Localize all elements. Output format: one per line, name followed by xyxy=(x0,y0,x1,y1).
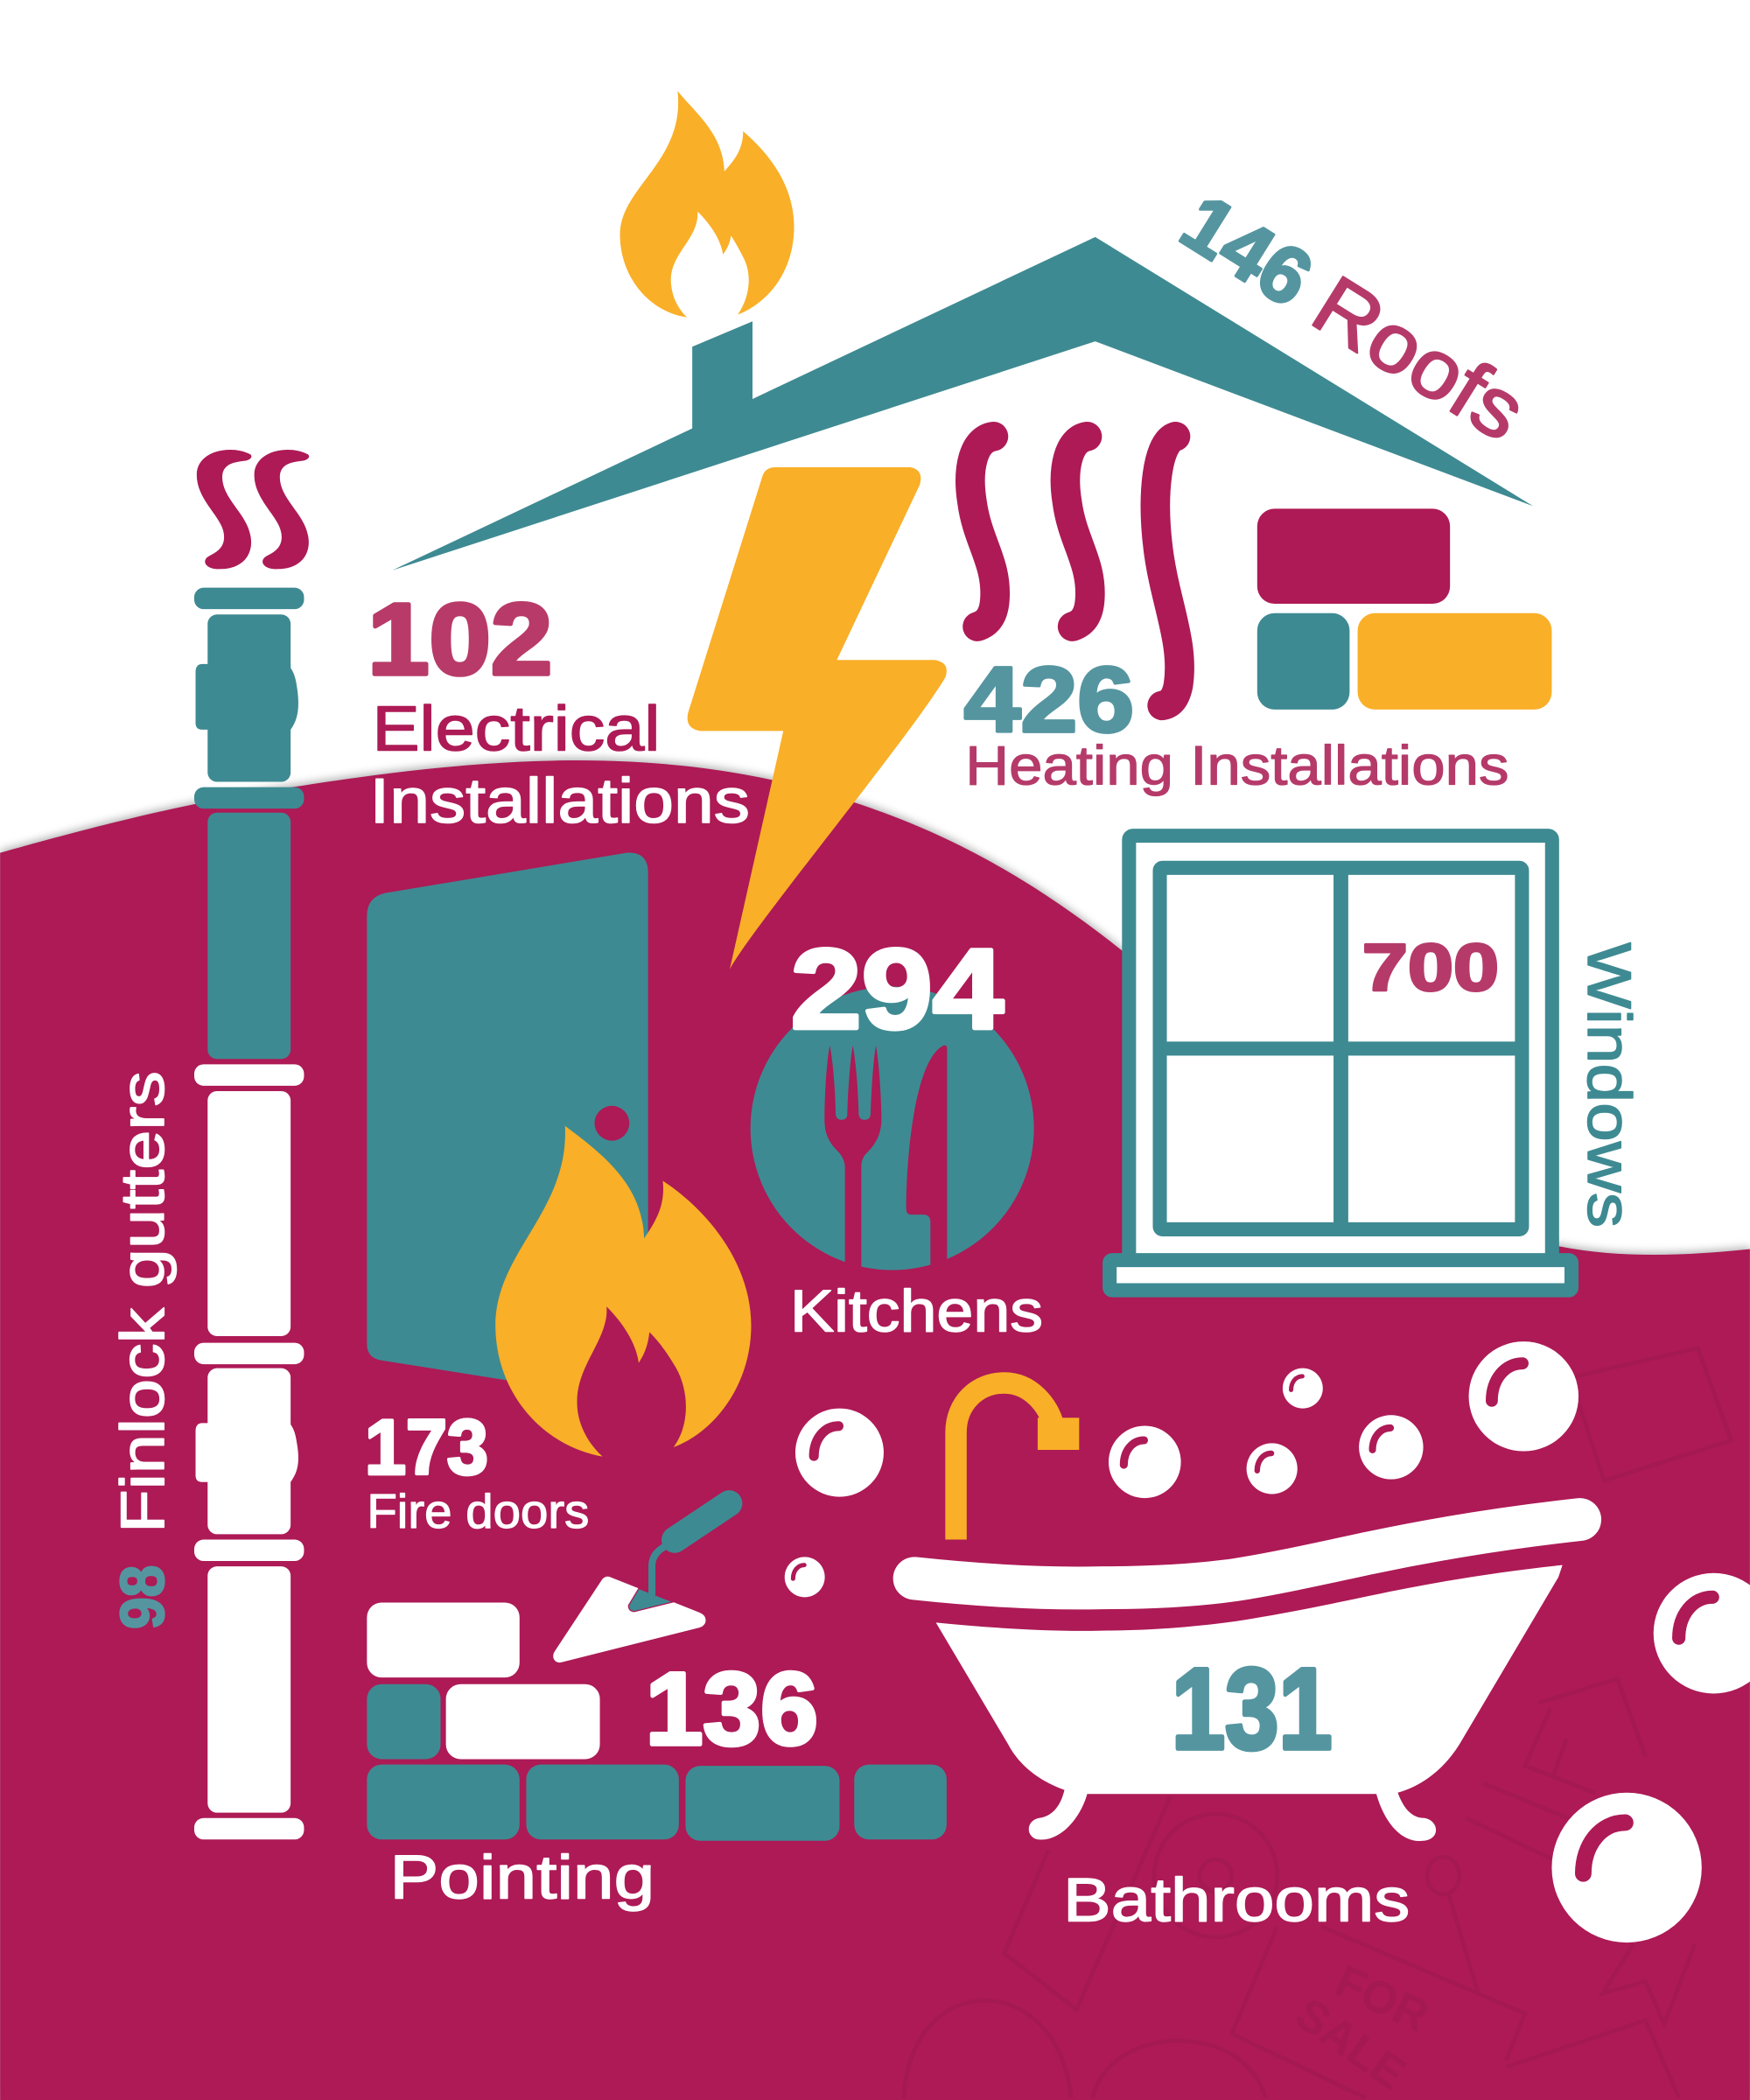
icon: bubble xyxy=(1283,1368,1323,1409)
icon: lightning bolt xyxy=(688,467,947,970)
stat: 294 kitchens: Kitchens xyxy=(790,1279,1043,1345)
stat: 102 electrical installations: Installations xyxy=(369,766,750,836)
stat: 136 pointing xyxy=(389,1651,818,1912)
stat: 173 fire doors: 173 xyxy=(365,1404,488,1491)
stat: 426 heating installations: 426 xyxy=(964,648,1134,752)
icon: door flame xyxy=(495,1126,751,1457)
stat: 131 bathrooms xyxy=(1063,1644,1410,1935)
stat: 173 fire doors: Fire doors xyxy=(367,1484,589,1538)
stat: 102 electrical installations: 102 xyxy=(368,582,552,696)
stat: 136 pointing: 136 xyxy=(646,1651,818,1767)
icon: gutter pipe xyxy=(194,588,304,1839)
background: maroon wave xyxy=(0,760,1750,2100)
faint text: for sale sign: FOR xyxy=(1327,1956,1436,2042)
stat: 173 fire doors xyxy=(365,1404,589,1538)
icon: pipe steam xyxy=(197,450,309,569)
icon: pointing bricks xyxy=(367,1602,947,1841)
icon: bubble xyxy=(1654,1573,1750,1693)
icon: bubble xyxy=(1551,1793,1702,1942)
icon: tap xyxy=(956,1383,1079,1540)
stat: 294 kitchens: 294 xyxy=(791,925,1004,1053)
icon: bubble xyxy=(795,1409,884,1497)
label: 146 roofs: 146 xyxy=(1166,178,1327,324)
roof with chimney xyxy=(392,237,1533,570)
stat: 700: 700 xyxy=(1362,931,1499,1005)
icon: chimney flame xyxy=(620,91,794,318)
stat: 131 bathrooms: 131 xyxy=(1172,1644,1333,1773)
icon: trowel xyxy=(553,1503,729,1662)
stat: 136 pointing: Pointing xyxy=(389,1843,654,1912)
label: 146 roofs xyxy=(1166,178,1542,458)
icon: top bricks xyxy=(1257,508,1551,710)
stat: 98 finlock gutters: Finlock gutters xyxy=(108,1071,177,1533)
icon: bath xyxy=(914,1520,1580,1841)
faint text: for sale sign: SALE xyxy=(1286,1989,1415,2100)
label: windows: Windows xyxy=(1575,942,1644,1228)
stat: 294 kitchens xyxy=(790,925,1043,1345)
stat: 426 heating installations xyxy=(964,648,1508,797)
faint text: for sale sign xyxy=(1286,1956,1436,2100)
icon: window xyxy=(1110,836,1572,1291)
label: 146 roofs: Roofs xyxy=(1297,258,1542,458)
icon: bubble xyxy=(1359,1415,1424,1480)
stat: 102 electrical installations xyxy=(368,582,750,836)
icon: bubble xyxy=(1109,1425,1181,1498)
faint property pattern xyxy=(904,1348,1731,2098)
icon: heat waves xyxy=(970,437,1180,705)
stat: 98 finlock gutters: 98 xyxy=(108,1565,177,1629)
icon: door xyxy=(367,853,648,1382)
icon: plate with cutlery xyxy=(751,987,1034,1270)
stat: 426 heating installations: Heating Installations xyxy=(965,736,1508,797)
icon: bubble xyxy=(785,1557,825,1597)
icon: bubble xyxy=(1469,1341,1578,1452)
stat: 102 electrical installations: Electrical xyxy=(372,695,660,765)
stat: 131 bathrooms: Bathrooms xyxy=(1063,1866,1410,1935)
icon: bubble xyxy=(1247,1443,1298,1494)
